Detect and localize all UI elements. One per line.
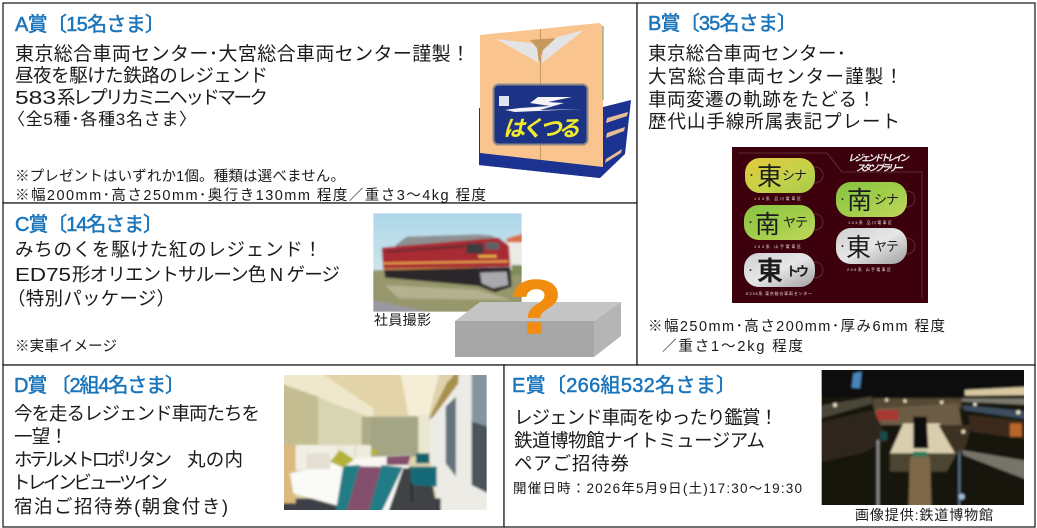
plate: Higashi Tou: E235系 東京総合車両センター (746, 290, 812, 296)
panel: prize E (504, 365, 1035, 527)
text block: prize D description: 今を走るレジェンド車両たちを (14, 403, 260, 424)
text block: prize A description: 昼夜を駆けた鉄路のレジェンド (15, 65, 268, 86)
heading: prize D: D賞 〔2組4名さま〕 (14, 374, 185, 397)
plate: Higashi Shina (745, 158, 823, 201)
plate: Higashi Yate: ･ (840, 242, 845, 253)
text block: prize A notes: ※幅200mm･高さ250mm･奥行き130mm 程度／重さ3～4kg 程度 (15, 187, 486, 204)
photo: hotel twin room (284, 375, 487, 510)
text block: prize B notes: ※幅250mm･高さ200mm･厚み6mm 程度 (648, 318, 945, 335)
text block: prize A description: 〈全5種･各種3名さま〉 (8, 110, 196, 129)
text block: prize A notes (15, 168, 486, 204)
text block: prize D description: トレインビューツイン (12, 472, 168, 493)
caption: image credit: 画像提供:鉄道博物館 (855, 507, 993, 523)
text block: prize C description: みちのくを駆けた紅のレジェンド！ (15, 239, 322, 260)
image: Yamanote line plates (732, 147, 928, 303)
plate: Higashi Tou (744, 253, 823, 296)
heading: prize B: B賞〔35名さま〕 (648, 12, 797, 35)
plate: Minami Shina: シナ (874, 192, 899, 207)
text block: prize D description: ホテルメトロポリタン (14, 449, 172, 470)
text block: prize D description: 一望！ (14, 426, 68, 447)
text block: prize C description (7, 239, 340, 309)
heading: prize A: A賞〔15名さま〕 (15, 13, 165, 36)
plate: Higashi Shina: ･ (749, 171, 754, 182)
text block: prize D description: 宿泊ご招待券(朝食付き) (14, 496, 228, 517)
text block: prize B description: 車両変遷の軌跡をたどる！ (648, 89, 876, 110)
text block: prize A description (8, 43, 470, 129)
text block: prize B notes (648, 318, 945, 355)
caption: photo credit: 社員撮影 (374, 312, 431, 328)
text block: prize E description: 開催日時：2026年5月9日(土)17:30～19:30 (513, 481, 802, 496)
plate: Minami Yate: ･ (748, 218, 753, 229)
plate: Minami Yate: ヤテ (783, 215, 808, 230)
plate: Minami Shina (836, 182, 915, 225)
plate: Higashi Shina: 東 (757, 163, 782, 191)
plate: Minami Shina: ･ (840, 195, 845, 206)
plate: Higashi Shina: シナ (782, 168, 807, 183)
photo: red locomotive (373, 213, 522, 312)
plate: Minami Yate: 103系 山手電車区 (754, 243, 801, 249)
text block: prize C description: 形オリエントサルーン色 N ゲージ (72, 264, 340, 285)
text block: prize A description: 東京総合車両センター･大宮総合車両センター謹製！ (15, 43, 470, 65)
plate: Minami Shina: 103系 品川電車区 (848, 219, 892, 225)
image: Yamanote line plates: スタンプラリー (856, 163, 904, 173)
panel: prize A (3, 3, 637, 204)
heading: prize E: E賞〔266組532名さま〕 (512, 374, 736, 397)
text block: prize C description: ED75 (15, 264, 71, 285)
text block: prize A notes: ※プレゼントはいずれか1個。種類は選べません。 (15, 168, 345, 185)
icon: hakutsuru head mark: はくつる (503, 116, 580, 141)
text block: prize E description: ペアご招待券 (514, 453, 629, 474)
text block: prize E description: レジェンド車両をゆったり鑑賞！ (514, 407, 778, 428)
plate: Higashi Tou: トウ (786, 264, 809, 279)
plate: Higashi Tou: 東 (757, 256, 783, 286)
text block: prize E description (513, 407, 802, 496)
text block: prize A description: 583 (15, 87, 56, 108)
text block: prize B description: 大宮総合車両センター謹製！ (648, 66, 903, 87)
plate: Higashi Yate: ヤテ (874, 239, 899, 254)
text block: prize A description: 系レプリカミニヘッドマーク (57, 87, 268, 108)
icon: mystery box with question mark: ? (510, 265, 562, 350)
plate: Higashi Tou: ･ (748, 266, 753, 277)
plate: Higashi Yate: 205系 山手電車区 (847, 266, 891, 272)
panel: prize B (637, 3, 1035, 365)
photo: railway museum at night (822, 370, 1024, 505)
plate: Higashi Shina: 103系 品川電車区 (754, 195, 801, 201)
text block: prize B description (648, 43, 903, 132)
panel: prize D (3, 365, 504, 527)
plate: Minami Shina: 南 (847, 187, 872, 215)
plate: Higashi Yate (836, 228, 915, 272)
text block: prize C note: ※実車イメージ (15, 338, 117, 355)
heading: prize C: C賞〔14名さま〕 (15, 213, 163, 236)
icon: mystery box with question mark (455, 265, 621, 357)
plate logo text: レジェンドトレイン (848, 153, 910, 163)
text block: prize B description: 東京総合車両センター･ (648, 43, 846, 64)
text block: prize B notes: ／重さ1～2kg 程度 (662, 338, 803, 355)
text block: prize E description: 鉄道博物館ナイトミュージアム (514, 430, 765, 451)
plate: Higashi Yate: 東 (846, 234, 871, 262)
text block: prize D description: 丸の内 (187, 449, 243, 470)
plate: Minami Yate (744, 205, 823, 249)
icon: hakutsuru head mark (479, 23, 631, 178)
text block: prize C description: （特別パッケージ） (7, 288, 175, 309)
text block: prize B description: 歴代山手線所属表記プレート (648, 111, 900, 132)
plate: Minami Yate: 南 (755, 211, 780, 239)
panel: prize C (3, 203, 637, 365)
text block: prize D description (12, 403, 260, 517)
